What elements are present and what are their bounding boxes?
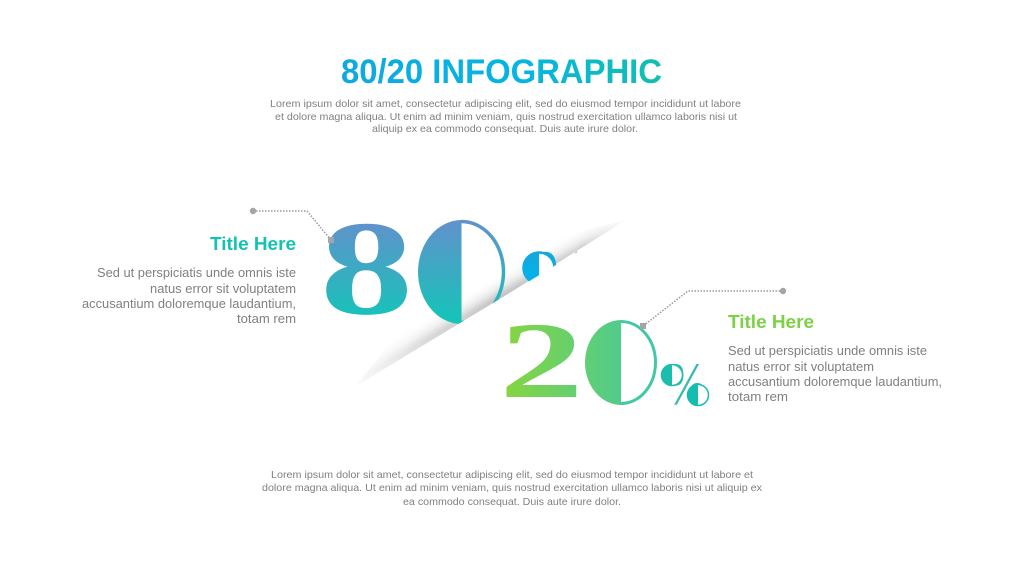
digit 0 half filled — [585, 320, 657, 405]
fold shadow — [364, 225, 616, 380]
digit 8: 8 — [320, 194, 413, 343]
left callout body: totam rem — [237, 312, 296, 326]
intro text block: aliquip ex ea commodo consequat. Duis aute irure dolor. — [372, 123, 638, 135]
left callout heading: Title Here — [210, 234, 296, 254]
big number: 80% — [326, 220, 578, 324]
left callout body: Sed ut perspiciatis unde omnis iste — [97, 266, 296, 280]
digit 0 half filled: 0 — [415, 194, 508, 343]
digit 0 half filled: 0 — [580, 300, 664, 421]
digit 0 half filled — [418, 220, 506, 324]
intro text block — [270, 98, 741, 135]
infographic canvas — [82, 58, 941, 507]
left callout — [82, 234, 296, 326]
bottom text block: ea commodo consequat. Duis aute irure dolor. — [403, 496, 621, 508]
bottom text block: Lorem ipsum dolor sit amet, consectetur adipiscing elit, sed do eiusmod tempor incididunt ut labore et — [271, 469, 753, 481]
title: 80/20 INFOGRAPHIC — [341, 53, 662, 91]
right callout — [728, 312, 942, 404]
right callout heading: Title Here — [728, 312, 814, 332]
right callout body: Sed ut perspiciatis unde omnis iste — [728, 344, 927, 358]
intro text block: et dolore magna aliqua. Ut enim ad minim veniam, quis nostrud exercitation ullamco laboris nisi ut — [275, 111, 737, 123]
right callout body: natus error sit voluptatem — [728, 360, 874, 374]
digit 2: 2 — [500, 300, 583, 421]
left callout body — [82, 266, 296, 326]
bottom text block — [262, 469, 763, 508]
percent sign: % — [531, 231, 591, 332]
percent sign — [522, 251, 578, 282]
right callout body — [728, 344, 942, 404]
right callout body: totam rem — [728, 390, 788, 404]
left callout body: natus error sit voluptatem — [150, 282, 296, 296]
left callout body: accusantium doloremque laudantium, — [82, 297, 296, 311]
bottom text block: dolore magna aliqua. Ut enim ad minim veniam, quis nostrud exercitation ullamco laboris nisi ut aliquip ex — [262, 482, 763, 494]
connector: right callout — [640, 288, 786, 329]
intro text block: Lorem ipsum dolor sit amet, consectetur adipiscing elit, sed do eiusmod tempor incididunt ut labore — [270, 98, 741, 110]
right callout body: accusantium doloremque laudantium, — [728, 375, 942, 389]
percent sign: % — [666, 351, 706, 417]
connector: left callout — [250, 208, 334, 243]
big number: 20% — [506, 320, 710, 406]
